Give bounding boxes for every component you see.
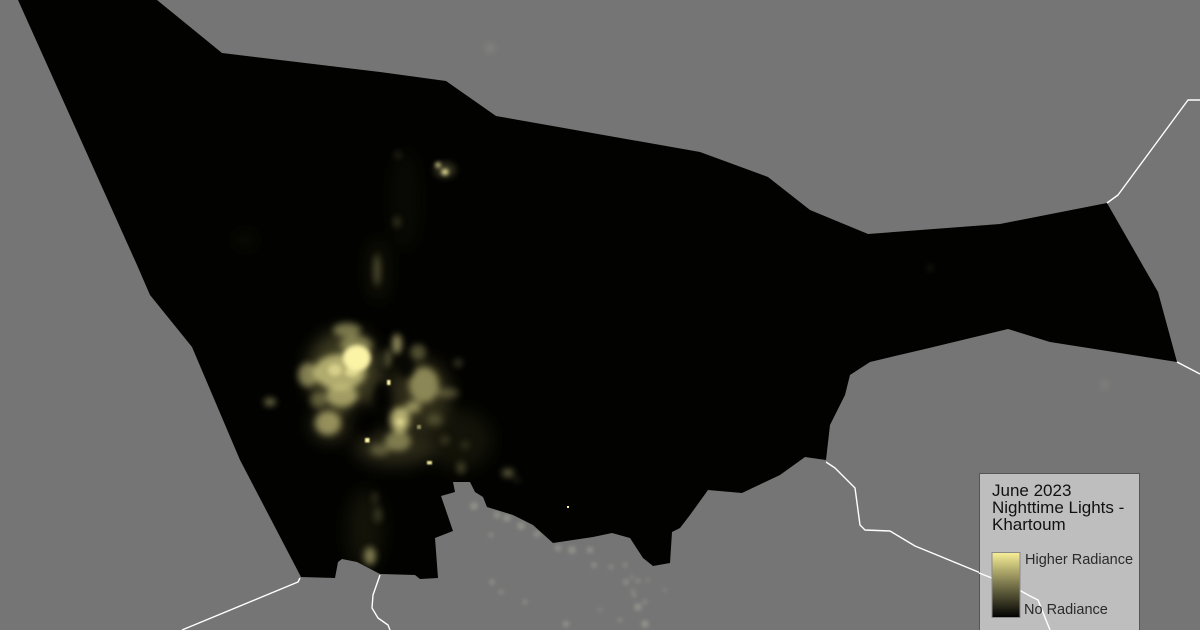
faint lights outside the state [470,43,1108,628]
legend colour ramp [992,552,1020,618]
bright cores [328,162,448,426]
urban glow: neighbourhoods [264,152,933,565]
legend title: June 2023 [992,481,1071,500]
admin boundaries [182,100,1200,630]
point lights [365,380,432,464]
legend title [992,481,1124,534]
legend panel [979,474,1140,630]
legend title: Nighttime Lights - [992,498,1124,517]
urban glow: dark river channels [346,346,418,420]
boundary through legend [979,573,1050,630]
point light: south [567,506,569,508]
legend labels: No Radiance [1024,602,1108,618]
legend title: Khartoum [992,515,1066,534]
urban glow: wide halo [300,248,490,566]
legend labels [1024,552,1133,618]
legend labels: Higher Radiance [1025,552,1133,568]
